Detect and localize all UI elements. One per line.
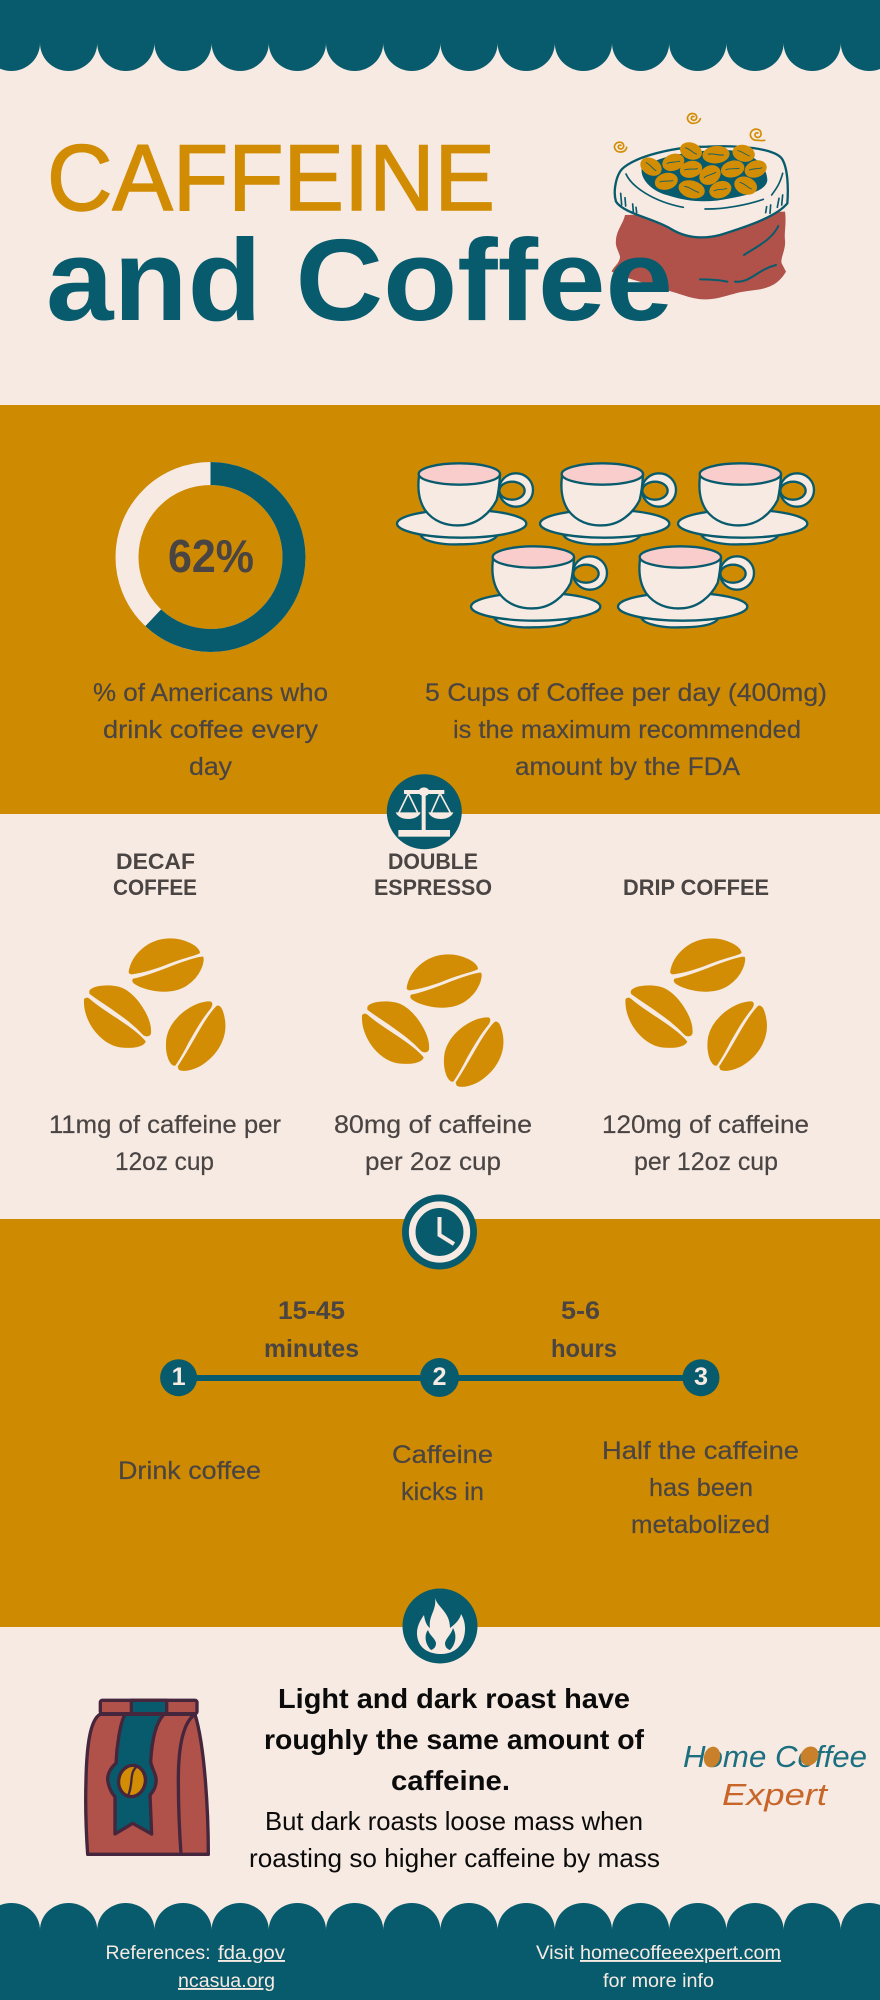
column: drip coffee: 120mg of caffeine [602, 1111, 809, 1139]
panel: light vs dark roast [86, 1683, 867, 1873]
icon: flame [402, 1588, 478, 1664]
label: 5-6 hours: 5-6 [561, 1297, 600, 1325]
text: percent of Americans: drink coffee every [103, 716, 319, 744]
text: FDA recommendation: 5 Cups of Coffee per day (400mg) [425, 679, 827, 707]
logo: Home Coffee Expert: Home Coffee [683, 1739, 867, 1774]
step 2 text [392, 1441, 493, 1506]
icon: sack of coffee beans [612, 114, 788, 299]
column: decaf coffee: 12oz cup [115, 1148, 214, 1176]
text: roast caffeine fact: roughly the same amount of [264, 1724, 645, 1755]
text: percent of Americans: % of Americans who [93, 679, 328, 707]
panel: daily coffee statistics [0, 405, 880, 814]
footer: visit site: Visit [536, 1943, 575, 1964]
column: double espresso: 80mg of caffeine [334, 1111, 532, 1139]
column: drip coffee [602, 875, 809, 1176]
text: percent of Americans: day [189, 753, 233, 781]
donut chart: 62 percent [127, 474, 294, 640]
step 3 text: has been [649, 1474, 753, 1502]
step 2 text: Caffeine [392, 1441, 493, 1469]
text: FDA recommendation: amount by the FDA [515, 753, 740, 781]
step 3 text: metabolized [631, 1511, 770, 1539]
footer: visit site [536, 1943, 781, 1992]
icon: clock [402, 1194, 477, 1270]
text: roast caffeine fact: Light and dark roast have [278, 1683, 630, 1714]
column: drip coffee: per 12oz cup [634, 1148, 778, 1176]
text: percent of Americans [93, 679, 328, 781]
icon: coffee bag [86, 1700, 208, 1854]
column: decaf coffee: COFFEE [113, 875, 197, 900]
column: decaf coffee: 11mg of caffeine per [49, 1111, 281, 1139]
step 1 text: Drink coffee [118, 1457, 261, 1485]
label: 5-6 hours [551, 1297, 617, 1363]
footer: references: References: [106, 1943, 210, 1964]
logo: Home Coffee Expert: Expert [722, 1777, 829, 1812]
column: double espresso: ESPRESSO [374, 875, 492, 900]
column: drip coffee: DRIP COFFEE [623, 875, 769, 900]
timeline line and numbered steps: 2 [432, 1363, 446, 1391]
step 3 text [602, 1437, 799, 1539]
title: CAFFEINE: CAFFEINE [47, 125, 495, 230]
column: double espresso [334, 849, 532, 1176]
text: roast mass note [249, 1806, 660, 1873]
timeline line and numbered steps: 1 [172, 1363, 186, 1391]
donut chart: 62 percent: 62% [168, 530, 254, 582]
text: roast mass note: roasting so higher caffeine by mass [249, 1843, 660, 1873]
step 2 text: kicks in [401, 1478, 484, 1506]
label: 15-45 minutes: 15-45 [278, 1297, 345, 1325]
timeline line and numbered steps [160, 1358, 720, 1397]
footer: references: fda.gov [218, 1943, 286, 1964]
bottom scalloped band [0, 1903, 880, 2000]
icon: five coffee cups [397, 463, 814, 627]
column: decaf coffee: DECAF [116, 849, 195, 874]
text: roast mass note: But dark roasts loose mass when [265, 1806, 643, 1836]
icon: balance scale [387, 774, 462, 849]
text: roast caffeine fact [264, 1683, 645, 1796]
top scalloped band [0, 0, 880, 71]
footer: references: ncasua.org [178, 1971, 275, 1992]
panel: caffeine by coffee type [49, 849, 809, 1176]
column: double espresso: DOUBLE [388, 849, 478, 874]
step 3 text: Half the caffeine [602, 1437, 799, 1465]
footer: visit site: homecoffeeexpert.com [580, 1943, 781, 1964]
panel: caffeine timeline [0, 1219, 880, 1627]
label: 15-45 minutes: minutes [264, 1335, 359, 1363]
column: decaf coffee [49, 849, 281, 1176]
timeline line and numbered steps: 3 [694, 1363, 708, 1391]
column: double espresso: per 2oz cup [365, 1148, 501, 1176]
text: FDA recommendation [425, 679, 827, 781]
text: roast caffeine fact: caffeine. [391, 1765, 510, 1796]
title: and Coffee: and Coffee [46, 215, 673, 345]
label: 5-6 hours: hours [551, 1335, 617, 1363]
footer: references [106, 1943, 286, 1992]
footer: visit site: for more info [603, 1971, 714, 1992]
text: FDA recommendation: is the maximum recommended [453, 716, 801, 744]
label: 15-45 minutes [264, 1297, 359, 1363]
logo: Home Coffee Expert [683, 1739, 867, 1812]
